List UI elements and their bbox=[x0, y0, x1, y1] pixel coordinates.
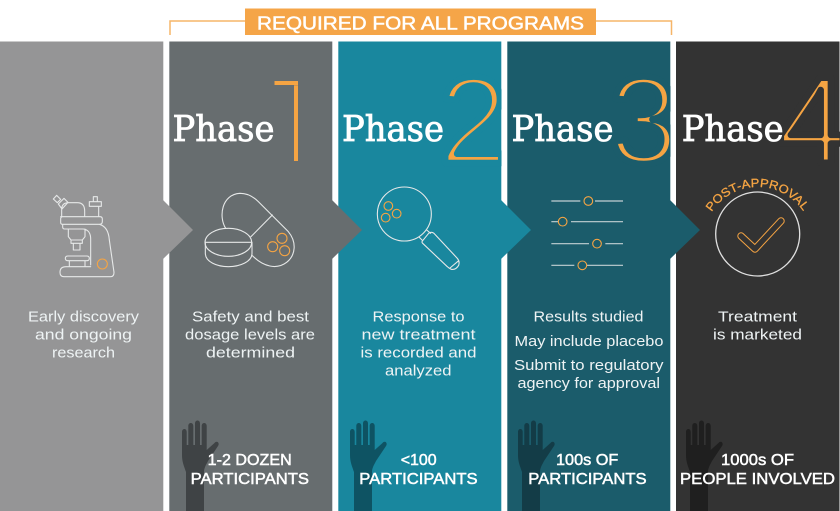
arrow: phase 3 to phase 4 bbox=[670, 200, 700, 259]
description: early discovery: research bbox=[52, 344, 115, 362]
participants: phase 2: <100 bbox=[401, 452, 437, 469]
icon: magnifying glass bbox=[377, 187, 459, 269]
top bracket: required programs bbox=[170, 8, 672, 35]
participants: phase 2: PARTICIPANTS bbox=[359, 471, 478, 488]
participants: phase 4 bbox=[680, 452, 835, 488]
description: early discovery: Early discovery bbox=[28, 308, 140, 326]
arrow: phase 2 to phase 3 bbox=[501, 200, 531, 259]
participants: phase 4: 1000s OF bbox=[721, 452, 794, 469]
description: phase 3: Submit to regulatory bbox=[514, 357, 664, 374]
icon: pills bbox=[205, 193, 294, 267]
heading: phase 2: Phase bbox=[342, 109, 444, 150]
icon: sliders bbox=[551, 197, 623, 270]
participants: phase 3: PARTICIPANTS bbox=[528, 471, 647, 488]
heading: phase 3: Phase bbox=[512, 109, 614, 150]
panel: phase 1 bbox=[169, 42, 334, 511]
arrow: discovery to phase 1 bbox=[163, 200, 193, 259]
description: phase 1 bbox=[185, 308, 315, 362]
description: phase 1: dosage levels are bbox=[185, 326, 315, 344]
participants: phase 1: 1-2 DOZEN bbox=[208, 452, 292, 469]
participants: phase 1: PARTICIPANTS bbox=[191, 471, 309, 488]
numeral 1 bbox=[274, 81, 298, 161]
participants: phase 2 bbox=[359, 452, 478, 488]
arrow: phase 1 to phase 2 bbox=[332, 200, 362, 259]
description: phase 2: analyzed bbox=[385, 362, 452, 380]
label: post-approval: POST-APPROVAL bbox=[705, 178, 808, 212]
description: phase 2: is recorded and bbox=[360, 344, 476, 361]
icon: raised hand bbox=[182, 420, 219, 511]
numeral 2: 2 bbox=[439, 53, 507, 190]
description: phase 4 bbox=[713, 308, 802, 344]
banner: required for all programs: REQUIRED FOR ALL PROGRAMS bbox=[257, 12, 584, 33]
description: phase 1: Safety and best bbox=[192, 308, 310, 326]
description: early discovery: and ongoing bbox=[35, 326, 132, 344]
icon: check in circle bbox=[716, 192, 800, 276]
description: phase 1: determined bbox=[206, 344, 295, 362]
description: phase 3: Results studied bbox=[534, 308, 644, 326]
icon: microscope bbox=[53, 195, 114, 277]
heading: phase 1: Phase bbox=[172, 109, 274, 150]
description: phase 3: May include placebo bbox=[514, 333, 664, 350]
description: phase 2 bbox=[360, 308, 476, 380]
description: phase 3: agency for approval bbox=[518, 375, 660, 392]
panel: phase 4 bbox=[676, 42, 840, 511]
icon: raised hand bbox=[350, 420, 387, 511]
description: phase 3 bbox=[514, 308, 664, 392]
participants: phase 3 bbox=[528, 452, 647, 488]
description: phase 2: new treatment bbox=[362, 326, 476, 343]
description: early discovery bbox=[28, 308, 140, 362]
participants: phase 4: PEOPLE INVOLVED bbox=[680, 471, 835, 488]
numeral 3: 3 bbox=[610, 53, 678, 190]
description: phase 2: Response to bbox=[372, 308, 464, 325]
description: phase 4: Treatment bbox=[718, 308, 798, 326]
participants: phase 3: 100s OF bbox=[556, 452, 619, 469]
description: phase 4: is marketed bbox=[713, 326, 802, 344]
participants: phase 1 bbox=[191, 452, 309, 488]
heading: phase 4: Phase bbox=[682, 109, 784, 150]
panel: early discovery bbox=[0, 42, 163, 511]
panel: phase 3 bbox=[507, 42, 678, 511]
banner: required for all programs bbox=[245, 8, 596, 35]
panel: phase 2 bbox=[338, 42, 507, 511]
icon: raised hand bbox=[518, 420, 555, 511]
icon: raised hand bbox=[686, 420, 723, 511]
numeral 1: 1 bbox=[253, 54, 334, 216]
